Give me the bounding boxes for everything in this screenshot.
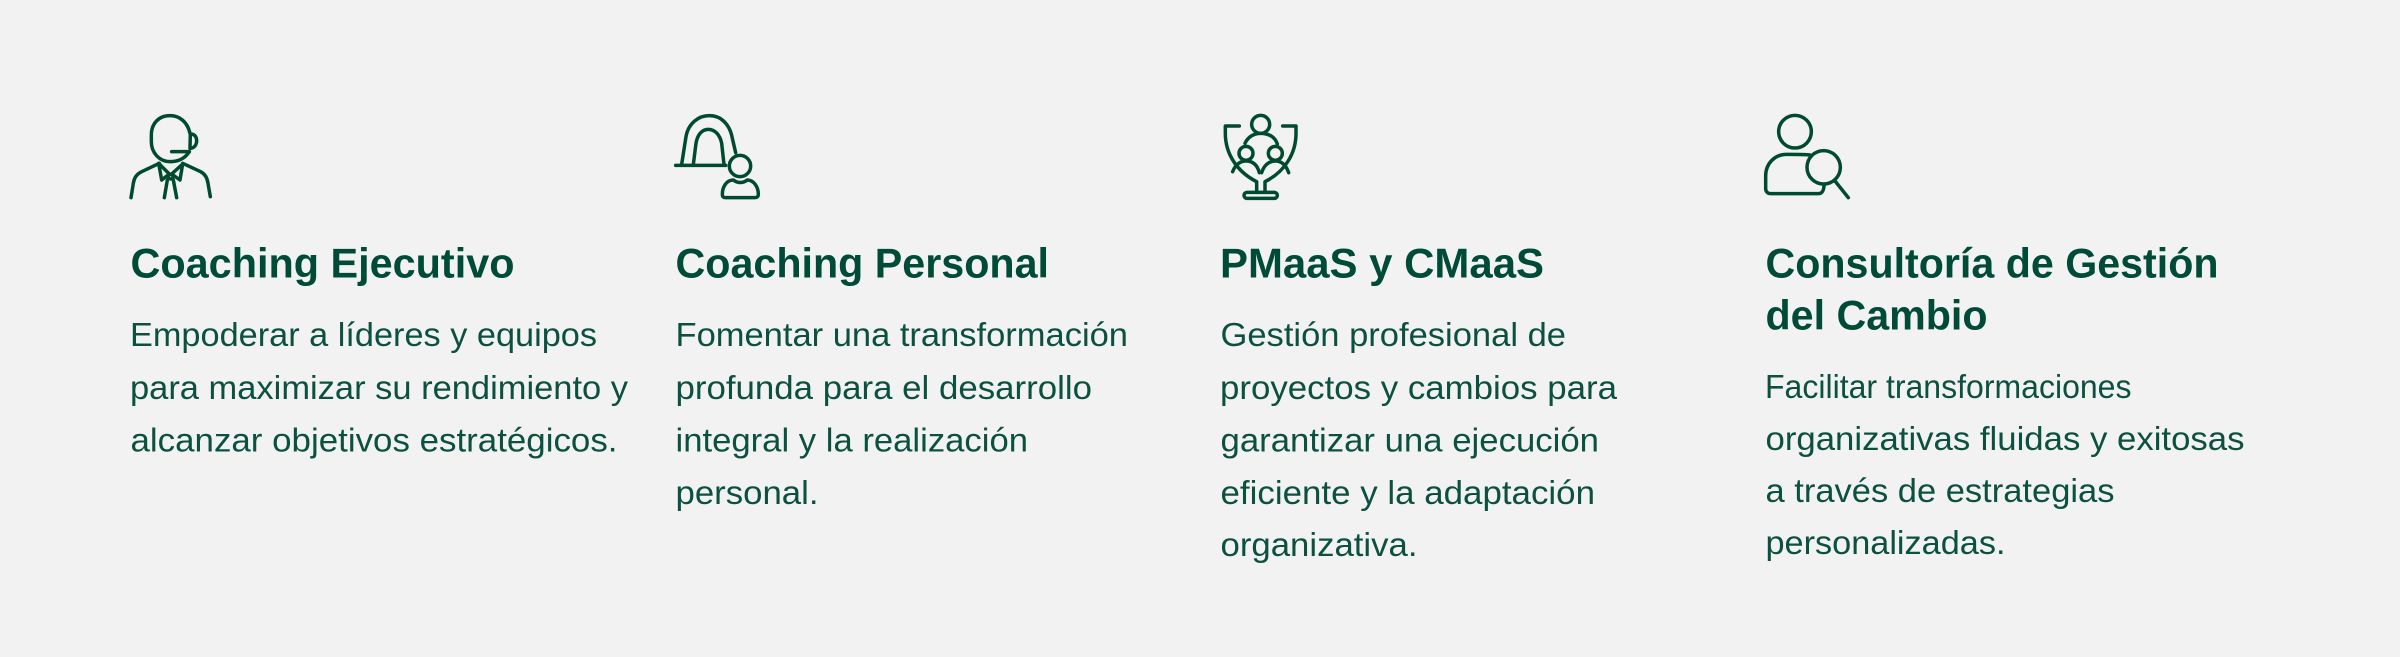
text: Coaching Personal description: integral y la realización — [676, 423, 1028, 460]
icon: executive with headset — [131, 116, 210, 198]
heading: Consultoría de Gestión del Cambio: del Cambio — [1766, 292, 1988, 338]
text: Consultoría description — [1765, 369, 2244, 562]
text: PMaaS y CMaaS description: eficiente y la adaptación — [1220, 475, 1595, 512]
text: Coaching Personal description: personal. — [676, 475, 818, 512]
text: Coaching Ejecutivo description — [130, 317, 628, 460]
text: Coaching Ejecutivo description: Empoderar a líderes y equipos — [130, 317, 597, 354]
text: PMaaS y CMaaS description — [1220, 317, 1617, 564]
panel: Coaching Personal — [676, 116, 1128, 512]
heading: Consultoría de Gestión del Cambio — [1766, 240, 2218, 338]
panel: Consultoría de Gestión del Cambio — [1765, 115, 2244, 562]
heading: Coaching Personal: Coaching Personal — [676, 240, 1049, 286]
text: PMaaS y CMaaS description: organizativa. — [1220, 527, 1418, 564]
text: PMaaS y CMaaS description: proyectos y cambios para — [1220, 370, 1617, 407]
text: Consultoría description: personalizadas. — [1766, 525, 2006, 562]
heading: Consultoría de Gestión del Cambio: Consultoría de Gestión — [1766, 240, 2218, 286]
text: Consultoría description: Facilitar transformaciones — [1765, 369, 2132, 406]
text: Coaching Ejecutivo description: alcanzar objetivos estratégicos. — [130, 423, 618, 460]
icon: arch and person — [676, 116, 758, 198]
text: Consultoría description: a través de estrategias — [1766, 473, 2114, 510]
text: Coaching Personal description: Fomentar una transformación — [676, 317, 1128, 354]
text: PMaaS y CMaaS description: Gestión profesional de — [1220, 317, 1566, 354]
text: Consultoría description: organizativas fluidas y exitosas — [1766, 421, 2244, 458]
text: PMaaS y CMaaS description: garantizar una ejecución — [1220, 423, 1599, 460]
icon: team in trophy cup — [1225, 115, 1296, 198]
heading: PMaaS y CMaaS: PMaaS y CMaaS — [1220, 240, 1544, 286]
panel: PMaaS y CMaaS — [1220, 115, 1617, 564]
text: Coaching Personal description: profunda para el desarrollo — [676, 370, 1092, 407]
heading: Coaching Ejecutivo: Coaching Ejecutivo — [130, 240, 514, 286]
text: Coaching Ejecutivo description: para maximizar su rendimiento y — [130, 370, 628, 407]
icon: person with magnifier — [1766, 115, 1848, 198]
text: Coaching Personal description — [676, 317, 1128, 512]
panel: Coaching Ejecutivo — [130, 116, 628, 460]
